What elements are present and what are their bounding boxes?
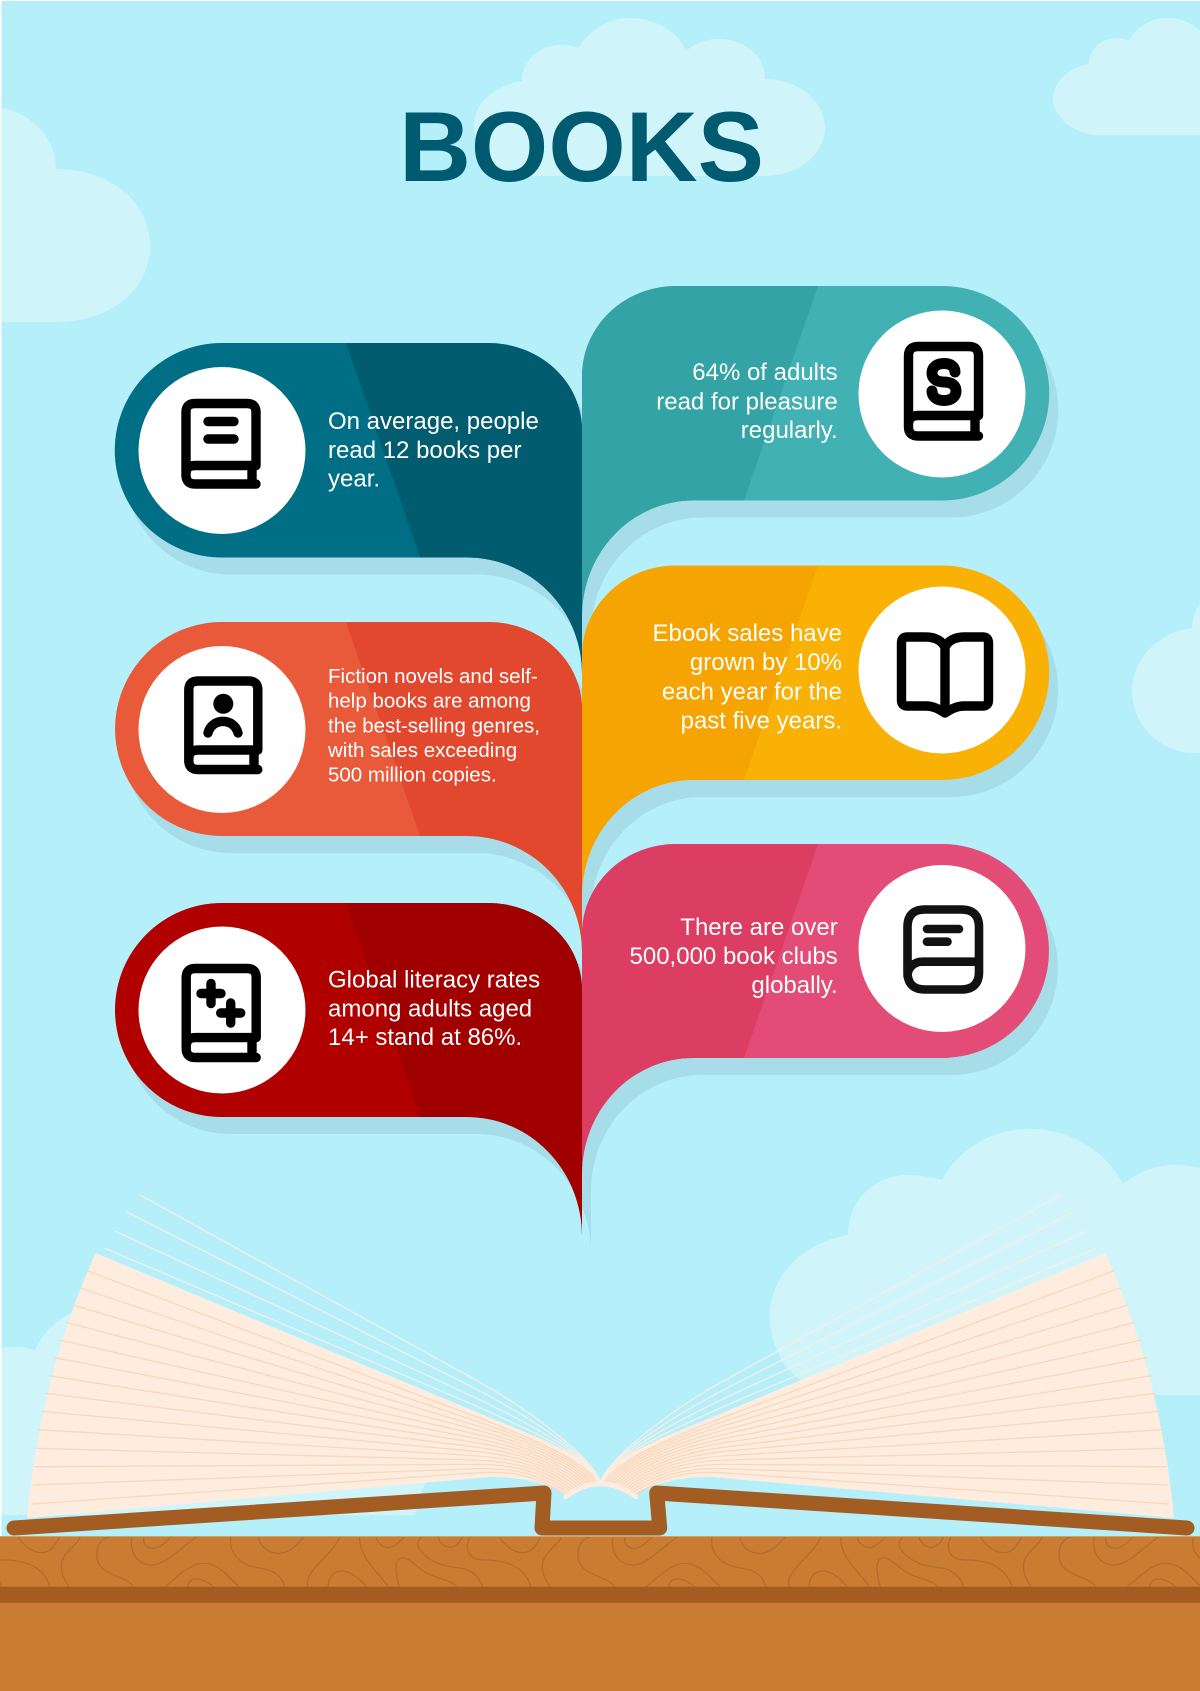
title: BOOKS xyxy=(399,92,764,203)
text: genres: the best-selling genres, xyxy=(328,715,540,738)
text: book clubs xyxy=(630,914,838,999)
text: literacy rates: 14+ stand at 86%. xyxy=(328,1024,522,1051)
panel: average books read per year xyxy=(115,343,591,690)
wooden table xyxy=(0,1536,1200,1691)
panel: reading for pleasure xyxy=(582,286,1058,634)
panel: ebook sales xyxy=(582,566,1058,913)
text: pleasure reading xyxy=(656,359,838,444)
text: literacy rates: Global literacy rates xyxy=(328,967,540,994)
icon: rounded book xyxy=(908,910,979,990)
text: genres: 500 million copies. xyxy=(328,764,497,787)
text: genres: Fiction novels and self- xyxy=(328,665,538,688)
text: books per year xyxy=(328,408,539,493)
icon: book with plus signs xyxy=(186,968,256,1058)
icon: book with letter S xyxy=(908,346,978,436)
text: ebook growth xyxy=(653,620,842,735)
text: pleasure reading: read for pleasure xyxy=(656,388,838,416)
panel: global literacy xyxy=(115,903,591,1253)
icon: open book xyxy=(902,637,988,713)
text: genres xyxy=(327,665,540,787)
text: pleasure reading: regularly. xyxy=(741,417,838,444)
text: books per year: year. xyxy=(328,466,380,493)
text: literacy rates: among adults aged xyxy=(328,995,532,1022)
text: ebook growth: Ebook sales have xyxy=(653,620,842,647)
text: ebook growth: past five years. xyxy=(681,708,842,735)
text: books per year: On average, people xyxy=(328,408,539,435)
text: book clubs: 500,000 book clubs xyxy=(630,943,838,970)
text: genres: help books are among xyxy=(328,690,531,713)
text: book clubs: There are over xyxy=(680,914,838,941)
icon: book with person xyxy=(189,681,258,770)
panel: book clubs xyxy=(582,844,1058,1191)
text: ebook growth: grown by 10% xyxy=(690,649,842,676)
text: ebook growth: each year for the xyxy=(662,678,842,705)
panel: best-selling genres xyxy=(115,622,591,969)
text: genres: with sales exceeding xyxy=(327,739,517,762)
text: books per year: read 12 books per xyxy=(328,437,521,464)
text: literacy rates xyxy=(328,967,540,1051)
text: pleasure reading: 64% of adults xyxy=(692,359,838,386)
icon: book with text lines xyxy=(186,404,256,484)
book cover xyxy=(14,1493,1187,1528)
open book pages xyxy=(27,1195,1174,1518)
text: book clubs: globally. xyxy=(751,972,838,999)
